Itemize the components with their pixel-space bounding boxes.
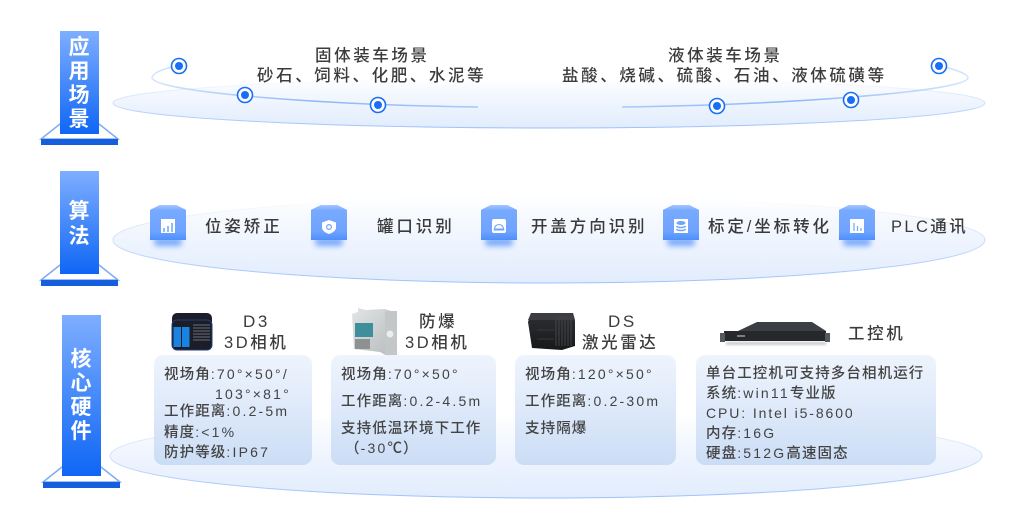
marker: right ring left — [710, 98, 724, 114]
heading: D3 3D camera: 3D相机 — [224, 333, 288, 352]
marker: left ring right — [370, 98, 386, 112]
heading: explosion-proof 3D camera: 3D相机 — [405, 333, 470, 352]
card: D3 specifications — [154, 355, 312, 465]
card: industrial computer specifications: CPU: Intel i5-8600 — [706, 405, 855, 421]
heading: D3 3D camera: D3 — [243, 312, 270, 331]
label: tank opening recognition: 罐口识别 — [377, 217, 455, 236]
marker: left ring middle — [238, 88, 252, 102]
pillar: core hardware: 件 — [70, 420, 92, 443]
card: industrial computer specifications: 硬盘:512G高速固态 — [706, 444, 849, 462]
pillar: application scenarios: 景 — [68, 108, 90, 131]
icon: lid direction recognition — [481, 205, 517, 246]
card: D3 specifications: 视场角:70°×50°/ — [164, 366, 289, 383]
card: D3 specifications: 精度:<1% — [164, 424, 236, 441]
panel: application scenarios ellipse — [113, 66, 985, 128]
card: industrial computer specifications — [696, 355, 936, 465]
card: explosion-proof specifications: 视场角:70°×50° — [341, 366, 460, 383]
heading: DS lidar: 激光雷达 — [582, 333, 658, 352]
label: pose correction: 位姿矫正 — [205, 216, 283, 236]
card: explosion-proof specifications: 支持低温环境下工作 — [341, 419, 481, 437]
product: explosion-proof 3D camera — [352, 308, 397, 357]
marker: right ring middle — [844, 92, 858, 108]
pillar: application scenarios: 用 — [68, 60, 90, 83]
heading: DS lidar: DS — [608, 312, 637, 331]
heading: D3 3D camera — [224, 312, 288, 352]
card: D3 specifications: 防护等级:IP67 — [164, 443, 270, 461]
marker: right ring top — [932, 58, 946, 74]
pillar: algorithm: 算 — [68, 200, 90, 223]
product: D3 3D camera — [172, 313, 212, 350]
text: solid loading scenario — [257, 46, 486, 85]
card: D3 specifications: 工作距离:0.2-5m — [164, 403, 289, 420]
pillar: application scenarios: 场 — [68, 84, 90, 107]
card: DS lidar specifications: 视场角:120°×50° — [525, 366, 654, 383]
pillar: core hardware: 核 — [70, 347, 92, 371]
pillar: application scenarios: 应 — [68, 35, 90, 59]
card: DS lidar specifications: 工作距离:0.2-30m — [525, 393, 660, 410]
card: industrial computer specifications: 系统:win11专业版 — [706, 384, 837, 402]
card: industrial computer specifications: 单台工控机可支持多台相机运行 — [706, 364, 924, 382]
heading: DS lidar — [582, 312, 658, 352]
pillar: core hardware: 硬 — [70, 396, 92, 419]
pillar: core hardware: 心 — [70, 372, 92, 395]
product: industrial computer — [720, 322, 830, 345]
icon: tank opening recognition — [311, 205, 347, 246]
card: explosion-proof specifications — [331, 355, 496, 465]
text: liquid loading scenario: 液体装车场景 — [668, 46, 783, 65]
card: explosion-proof specifications: （-30℃） — [345, 440, 419, 457]
text: liquid loading scenario — [562, 46, 887, 85]
marker: left ring top — [172, 58, 186, 74]
label: PLC communication: PLC通讯 — [891, 217, 968, 236]
panel: algorithm ellipse — [113, 197, 985, 283]
heading: explosion-proof 3D camera — [405, 312, 470, 352]
icon: calibration and coordinate conversion — [663, 205, 699, 246]
panel: core hardware ellipse — [110, 414, 982, 498]
text: liquid loading scenario: 盐酸、烧碱、硫酸、石油、液体硫磺等 — [562, 66, 887, 85]
label: calibration and coordinate conversion: 标定/坐标转化 — [708, 216, 832, 236]
card: DS lidar specifications — [515, 355, 676, 465]
card: DS lidar specifications: 支持隔爆 — [525, 420, 587, 437]
pillar: algorithm: 法 — [68, 225, 90, 248]
icon: PLC communication — [839, 205, 875, 246]
card: D3 specifications: 103°×81° — [215, 386, 291, 402]
pillar: application scenarios — [41, 31, 118, 145]
heading: explosion-proof 3D camera: 防爆 — [419, 312, 457, 331]
card: industrial computer specifications: 内存:16G — [706, 425, 776, 442]
text: solid loading scenario: 砂石、饲料、化肥、水泥等 — [257, 66, 486, 85]
card: explosion-proof specifications: 工作距离:0.2-4.5m — [341, 393, 482, 410]
product: DS lidar — [528, 313, 575, 350]
icon: pose correction — [150, 205, 186, 246]
text: solid loading scenario: 固体装车场景 — [315, 46, 430, 65]
heading: industrial computer: 工控机 — [848, 324, 905, 343]
pillar: algorithm — [41, 171, 118, 286]
label: lid direction recognition: 开盖方向识别 — [531, 216, 647, 236]
pillar: core hardware — [43, 315, 120, 488]
